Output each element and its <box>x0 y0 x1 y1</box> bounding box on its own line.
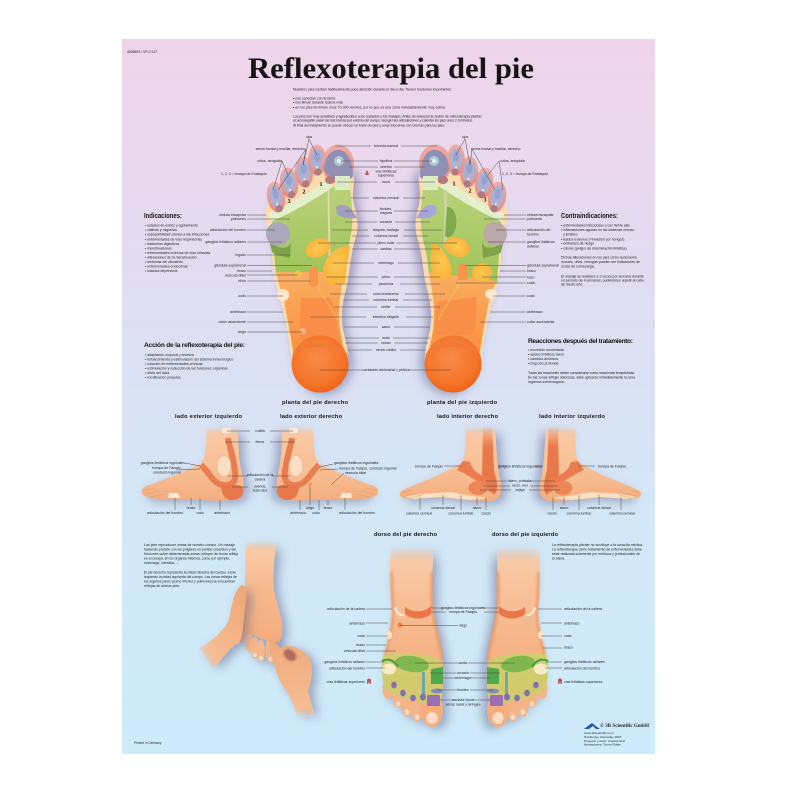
intro text: • nos conectan con la tierra <box>293 96 335 100</box>
text block: massage explanation: en el cuerpo, en los órganos internos, como por ejemplo, <box>144 556 230 560</box>
zone: adrenal and kidney <box>309 266 318 287</box>
zone: heel <box>292 336 348 392</box>
labels: plantar right foot left side: riñón <box>238 279 246 283</box>
text block: massage explanation: haciendo presión con los pulgares en puntos concretos y las <box>144 547 236 551</box>
panel: contraindicaciones: micosis, uñas, verrugas pueden ser indicadores de <box>561 260 640 264</box>
labels: plantar left foot right side: axilares <box>527 244 539 248</box>
panel: indicaciones: • trastornos digestivos <box>145 242 180 246</box>
labels: side views: ganglios linfáticos inguinales <box>498 465 542 469</box>
caption: planta del pie izquierdo: planta del pie izquierdo <box>427 400 497 406</box>
labels: plantar center column: corazón <box>380 220 392 224</box>
toe numbers: 1 <box>320 182 322 188</box>
labels: side views: columna dorsal <box>431 506 455 510</box>
labels: plantar center column: tráquea, esófago <box>373 228 399 232</box>
toe numbers <box>288 182 322 205</box>
labels: dorsal: ganglios linfáticos axilares <box>324 660 365 664</box>
labels: side views: vejiga <box>515 488 525 492</box>
labels: side views: articulación de la <box>247 473 273 477</box>
panel: contraindicaciones: • cáncer (peligro de diseminación linfática) <box>561 246 627 250</box>
label lines: plantar <box>247 139 526 370</box>
labels: plantar center column: nervio ciático <box>376 348 396 352</box>
labels: plantar left foot right side: ojos <box>462 135 468 139</box>
zone: heart <box>445 207 456 237</box>
panel: contraindicaciones: y linfático <box>563 233 578 237</box>
labels: side views: rodilla <box>255 429 265 433</box>
zone: gall bladder <box>294 270 302 278</box>
logo: 3B Scientific <box>584 722 649 746</box>
panel: contraindicaciones: • inflamaciones agudas en los sistemas venoso <box>561 228 634 232</box>
labels: side views: cadera <box>255 478 265 482</box>
panel: reacciones después del tratamiento: • tejidos linfáticos laxos <box>528 352 564 356</box>
labels: side views: testículos <box>253 489 268 493</box>
panel: acción de la reflexoterapia: • curación de enfermedades crónicas <box>145 362 203 366</box>
labels: dorsal: codo <box>357 634 365 638</box>
labels: side views: codo <box>312 511 320 515</box>
labels: side views: ganglios linfáticos inguinales <box>141 461 185 465</box>
text block: massage explanation: El pie derecho representa la mitad derecha del cuerpo, el pie <box>144 570 236 574</box>
labels: side views: fémur <box>256 440 265 444</box>
panel: reacciones después del tratamiento: • irrupción profunda <box>528 362 558 366</box>
zone: elbow <box>485 289 497 299</box>
panel: contraindicaciones: zonas de sobrecarga. <box>561 264 595 268</box>
zone: orange abdomen <box>276 272 345 358</box>
labels: plantar right foot left side: hígado <box>235 253 246 257</box>
labels: plantar right foot left side: articulación del hombro <box>210 228 246 232</box>
icon: lymph vessels right <box>367 678 371 684</box>
logo: 3B Scientific: Ilustraciones: Tomer Rothe <box>584 742 621 746</box>
zone: small intestine <box>435 297 476 335</box>
labels: dorsal: antebrazo <box>349 621 365 625</box>
heading: contraindicaciones: Contraindicaciones: <box>561 211 618 220</box>
foot: lado exterior derecho <box>277 426 378 501</box>
panel: reacciones después del tratamiento: orgánica sobrecargada. <box>528 380 565 384</box>
labels: plantar right foot left side: cintura escapular <box>219 213 247 217</box>
panel: indicaciones: • síntomas del climaterio <box>145 260 183 264</box>
labels: plantar right foot left side: ganglios linfáticos axilares <box>205 240 246 244</box>
labels: dorsal: cavidad bucal <box>452 698 474 702</box>
labels: side views: articulación del hombro <box>147 511 183 515</box>
labels: side views: columna lumbar <box>449 512 474 516</box>
panel: contraindicaciones: Dichas alteraciones en los pies como sudoración, <box>561 256 638 260</box>
labels: dorsal: ganglios linfáticos inguinales <box>441 606 485 610</box>
zone: elbow <box>277 289 289 301</box>
labels: side views: conducto inguinal <box>153 470 181 474</box>
labels: plantar center column: páncreas <box>379 282 393 286</box>
poster background <box>122 39 655 754</box>
logo: 3B Scientific: Proyecto y texto: Joanna Graf <box>584 739 625 743</box>
labels: plantar center column: columna lumbar <box>374 298 399 302</box>
labels: plantar left foot right side: antebrazo <box>527 310 543 314</box>
text block: massage explanation: izquierdo la mitad izquierda del cuerpo. Las zonas reflejas de <box>144 575 237 579</box>
labels: dorsal: ciego <box>459 624 467 628</box>
labels: plantar center column: uréter <box>381 305 391 309</box>
panel: contraindicaciones: • tejidos externos (=invasión por hongos) <box>561 237 624 241</box>
labels: plantar center column: estómago <box>378 261 394 265</box>
labels: dorsal: brazo <box>564 646 573 650</box>
toe numbers: 3 <box>484 198 486 204</box>
labels: side views: columna dorsal <box>587 506 611 510</box>
panel: acción de la reflexoterapia: • fortalecimiento y estimulación del sistema inmunológico <box>145 358 233 362</box>
labels: dorsal: vías linfáticas superiores <box>564 680 603 684</box>
labels: side views: trompa de Falopio, conducto inguinal <box>339 467 397 471</box>
labels: side views: columna cervical <box>406 512 432 516</box>
labels: dorsal: articulación de la cadera <box>327 607 365 611</box>
labels: plantar center column: sacro <box>382 325 390 329</box>
caption: lado interior derecho: lado interior derecho <box>437 414 498 420</box>
zone: gall bladder <box>328 484 332 486</box>
labels: plantar center column: nuca <box>382 180 390 184</box>
labels: plantar center column: tráquea <box>380 211 392 215</box>
labels: side views: columna cervical <box>609 512 635 516</box>
panel: indicaciones: • estados depresivos <box>145 269 178 273</box>
panel: acción de la reflexoterapia: • alivio del dolor <box>145 371 170 375</box>
labels: dorsal: estómago <box>455 676 471 680</box>
panel: reacciones después del tratamiento: Todas las reacciones deben considerarse como reacciones terapéuticas. <box>528 371 635 375</box>
text block: massage explanation: fricciones sobre determinadas zonas, influyen de forma refleja <box>144 552 238 556</box>
labels: plantar center column: cavidades abdominal y pélvica <box>362 368 410 372</box>
labels: side views: columna lumbar <box>567 512 592 516</box>
intro text: • nos llevan durante toda la vida <box>293 100 343 104</box>
title: Reflexoterapia del pie <box>248 52 534 85</box>
labels: dorsal: vías linfáticas superiores <box>327 680 365 684</box>
labels: plantar left foot right side: glándula suprarrenal <box>527 264 559 268</box>
zone: spleen <box>472 264 492 282</box>
labels: plantar left foot right side: oídos, amígdala <box>500 159 525 163</box>
toe numbers: 2 <box>302 190 306 196</box>
labels: plantar right foot left side: codo <box>238 294 246 298</box>
labels: side views: sacro <box>473 506 481 510</box>
labels: dorsal: tiroides <box>457 688 469 692</box>
labels: dorsal: ganglios linfáticos axilares <box>564 660 605 664</box>
labels: side views: cóccix <box>481 512 491 516</box>
labels: side views: trompa de Falopio, <box>152 466 182 470</box>
labels: plantar left foot right side: brazo <box>527 269 536 273</box>
panel: contraindicaciones: • enfermedades infecciosas y con fiebre alta <box>561 224 630 228</box>
panel: contraindicaciones: de medio año. <box>561 283 583 287</box>
zone: solar plexus <box>302 234 334 262</box>
labels: plantar right foot left side: ciego <box>238 330 246 334</box>
text block: massage explanation: reflejas de ambos pies. <box>144 584 180 588</box>
labels: plantar right foot left side: senos frontal y maxilar, derecho <box>256 147 305 151</box>
panel: acción de la reflexoterapia: • adaptación corporal y anímica <box>145 353 194 357</box>
foot: lado interior derecho <box>400 426 501 501</box>
foot <box>237 540 282 663</box>
zone: shoulder <box>266 222 290 246</box>
labels: plantar right foot left side: antebrazo <box>230 310 246 314</box>
logo: 3B Scientific: © 3B Scientific GmbH <box>600 722 649 729</box>
zone: small intestine <box>300 298 338 340</box>
heading: indicaciones: Indicaciones: <box>144 211 182 220</box>
labels: side views <box>141 429 635 516</box>
text block: medical note: estar realizada solamente por médicos y profesionales de <box>552 552 640 556</box>
labels: plantar center column: bóveda craneal <box>374 144 398 148</box>
left hand <box>199 585 246 668</box>
caption: planta del pie derecho: planta del pie derecho <box>282 400 348 406</box>
labels: plantar center column <box>362 144 410 372</box>
zone: adrenal and kidney <box>458 264 467 280</box>
labels: plantar left foot right side: pulmones <box>527 217 542 221</box>
text block: massage explanation <box>144 543 238 588</box>
labels: plantar center column: vías linfáticas <box>375 169 397 173</box>
foot: lado interior izquierdo <box>540 426 641 501</box>
icon: lymph vessels left <box>558 678 562 684</box>
labels: dorsal: vesícula biliar <box>344 649 366 653</box>
labels: side views: ciego <box>306 506 314 510</box>
labels: plantar left foot right side: senos frontal y maxilar, derecho <box>471 147 520 151</box>
labels: plantar left foot right side: 1, 2, 3 = trompa de Eustaquio <box>502 172 548 176</box>
labels: plantar left foot right side: ganglios linfáticos <box>527 240 555 244</box>
text block: medical note: la salud. <box>552 556 565 560</box>
labels: side views: sacro <box>560 506 568 510</box>
labels: side views: vesícula biliar <box>345 471 367 475</box>
labels: plantar center column: tiroides, <box>380 207 392 211</box>
intro text: • en los pies terminan unos 70.000 nervios, por lo que es una zona indudablemente muy activa <box>293 106 445 110</box>
labels: plantar right foot left side: brazo <box>237 269 246 273</box>
intro text: es aconsejable pasar las dos manos por encima del cuerpo, recoger las articulaciones y calentar los pies unos 2-3 minutos. <box>293 119 473 123</box>
labels: dorsal: corazón <box>457 671 469 675</box>
icon: lymph vessels <box>365 170 369 175</box>
labels: plantar left foot right side: colon ascendente <box>527 320 554 324</box>
labels: side views: recto, ano <box>512 484 528 488</box>
icon: logo triangle <box>584 723 600 729</box>
labels: plantar left foot right side: hombro <box>527 232 539 236</box>
foot: planta del pie izquierdo <box>415 144 509 392</box>
labels: side views: útero, próstata <box>509 479 531 483</box>
panel: acción de la reflexoterapia: • movilización psíquica <box>145 376 180 380</box>
labels: dorsal <box>324 606 605 706</box>
labels: side views: antebrazo <box>214 511 230 515</box>
panel: contraindicaciones <box>561 211 644 287</box>
labels: dorsal: articulación del hombro <box>564 666 600 670</box>
foot: dorso del pie derecho <box>382 546 443 727</box>
labels: dorsal: trompa de Falopio <box>449 610 477 614</box>
intro text: Nuestros pies reciben habitualmente poca atención durante el día a día. Tienen funciones importantes: <box>293 88 452 92</box>
toe numbers: 2 <box>468 188 472 194</box>
illustration: hands massaging foot <box>199 540 315 718</box>
panel: reacciones después del tratamiento: • excreción aumentada <box>528 348 564 352</box>
text block: massage explanation: los órganos pares (como riñones y pulmones) se encuentran <box>144 580 235 584</box>
labels: plantar center column: colon transverso <box>373 292 399 296</box>
labels: side views: antebrazo <box>290 511 306 515</box>
zone: heel <box>424 336 482 392</box>
labels: plantar right foot left side <box>205 135 312 334</box>
foot: dorso del pie izquierdo <box>487 546 548 727</box>
labels: plantar center column: cerebro <box>380 165 392 169</box>
labels: side views: cóccix <box>547 512 557 516</box>
toe numbers <box>452 182 486 204</box>
panel: indicaciones: • ciáticas y migrañas <box>145 228 177 232</box>
panel: indicaciones: • menstruaciones <box>145 246 172 250</box>
labels: dorsal: antebrazo <box>564 621 580 625</box>
panel: indicaciones: • enfermedades de vías respiratorias <box>145 237 202 241</box>
labels: plantar right foot left side: oídos, amígdala <box>257 159 282 163</box>
labels: dorsal: articulación de la cadera <box>564 607 602 611</box>
labels: plantar center column: hipófisis <box>380 159 393 163</box>
panel: indicaciones: • enfermedades endocrinas <box>145 265 188 269</box>
caption: lado exterior izquierdo: lado exterior izquierdo <box>175 414 242 420</box>
intro text <box>293 88 482 128</box>
labels: side views: codo <box>196 511 204 515</box>
right hand <box>269 642 315 718</box>
labels: plantar center column: intestino delgado <box>373 315 399 319</box>
panel: indicaciones: • estados de estrés y agotamiento <box>145 224 198 228</box>
panel: indicaciones <box>144 211 210 273</box>
labels: plantar center column: cardias <box>380 247 392 251</box>
labels: side views: articulación del hombro <box>339 511 375 515</box>
labels: side views: ganglios linfáticos inguinales <box>334 461 379 465</box>
heading: acción: Acción de la reflexoterapia del pie: <box>144 342 245 349</box>
printed note: Printed in Germany <box>134 741 162 745</box>
panel: contraindicaciones: • embarazo de riesgo <box>561 242 594 246</box>
labels: plantar right foot left side: ojos <box>306 135 312 139</box>
labels: side views: trompa de Falopio <box>415 465 443 469</box>
zone: solar plexus <box>442 234 472 260</box>
caption: lado interior izquierdo: lado interior izquierdo <box>539 414 605 420</box>
panel: indicaciones: • alteraciones de la menstruación <box>145 256 197 260</box>
toe numbers: 1 <box>452 182 456 188</box>
panel: reacciones después del tratamiento: En las zonas reflejas dolorosas, debe aplicarse inmediatamente la zona <box>528 376 635 380</box>
text block: medical note: La reflexoterapia plantar no sustituye a la consulta médica. <box>552 543 643 547</box>
labels: plantar center column: cóccix <box>381 341 391 345</box>
labels: dorsal: codo <box>564 634 572 638</box>
intro text: Al final del tratamiento se puede ofrecer un baño de pies y unas fricciones con cremas para los pies. <box>293 124 445 128</box>
labels: dorsal: brazo <box>356 643 365 647</box>
labels: plantar center column: superiores <box>378 173 394 177</box>
zone: cecum <box>398 622 402 628</box>
labels: dorsal: senos nasal y laringea <box>446 702 480 706</box>
text block: massage explanation: estómago, intestino, ... <box>144 561 179 565</box>
panel: indicaciones: • enfermedades crónicas de vías urinarias <box>145 251 210 255</box>
palm shadow <box>281 647 299 663</box>
foot: lado exterior izquierdo <box>142 426 243 501</box>
text block: massage explanation: Los pies reproducen zonas de nuestro cuerpo. Un masaje <box>144 543 235 547</box>
label lines: dorsal <box>366 608 562 700</box>
zone: stomach <box>431 243 452 280</box>
heading: reacciones: Reacciones después del tratamiento: <box>528 338 633 345</box>
labels: plantar center column: columna dorsal <box>374 234 398 238</box>
toe numbers: 3 <box>288 199 290 205</box>
labels: plantar left foot right side: colon <box>527 281 535 285</box>
zone: pancreas <box>323 275 345 285</box>
caption: lado exterior derecho: lado exterior derecho <box>280 414 342 420</box>
logo: 3B Scientific: www.3bscientific.com <box>584 731 614 735</box>
foot: planta del pie derecho <box>264 144 358 392</box>
labels: plantar right foot left side: vesícula biliar <box>225 273 247 277</box>
intro text: Los pies son muy sensitivos y agradecidos a los cuidados y los masajes. Antes de empezar la sesión de reflexoterapia plantar, <box>293 114 482 118</box>
zone: cecum <box>308 482 312 486</box>
product code: 4006893 / VR 3 917 <box>127 50 157 54</box>
panel: contraindicaciones: un período de 4 semanas, pudiéndose repetir al cabo <box>561 278 644 282</box>
labels: plantar center column: columna cervical <box>373 196 399 200</box>
labels: plantar right foot left side: 1, 2, 3 = trompa de Eustaquio <box>221 172 267 176</box>
zone: green chest <box>272 186 352 275</box>
labels: dorsal: aorta <box>459 661 467 665</box>
labels: plantar center column: plexo solar <box>378 241 395 245</box>
labels: plantar left foot right side: codo <box>527 294 535 298</box>
labels: plantar center column: recto <box>382 336 390 340</box>
labels: plantar left foot right side <box>462 135 559 324</box>
caption: dorso del pie izquierdo: dorso del pie izquierdo <box>492 532 558 538</box>
caption: dorso del pie derecho: dorso del pie derecho <box>374 532 437 538</box>
panel: reacciones después del tratamiento: • cambios anímicos <box>528 357 558 361</box>
labels: side views: ovarios, <box>254 484 266 488</box>
panel: acción de la reflexoterapia <box>144 342 245 380</box>
labels: plantar left foot right side: bazo <box>527 275 535 279</box>
labels: plantar right foot left side: glándula suprarrenal <box>214 264 246 268</box>
logo: 3B Scientific: Hamburgo, Alemania, 2007 <box>584 735 622 739</box>
zone: toe band <box>268 181 333 221</box>
labels: plantar right foot left side: colon ascendente <box>219 320 246 324</box>
labels: plantar right foot left side: pulmones <box>231 217 246 221</box>
labels: side views: brazo <box>324 506 332 510</box>
labels: side views: brazo <box>187 506 195 510</box>
labels: plantar center column: píloro <box>382 275 390 279</box>
text block: medical note <box>552 543 643 560</box>
labels: plantar left foot right side: cintura escapular <box>527 213 554 217</box>
panel: indicaciones: • susceptibilidad crónica a las infecciones <box>145 233 210 237</box>
text block: medical note: La reflexoterapia como tratamiento de enfermedades debe <box>552 547 642 551</box>
labels: dorsal: articulación del hombro <box>329 666 365 670</box>
panel: acción de la reflexoterapia: • estimulación y reducción de las funciones orgánicas <box>145 366 228 370</box>
zone: thyroid <box>336 205 357 218</box>
panel: contraindicaciones: El masaje se realizará 1-2 veces por semana durante <box>561 274 644 278</box>
zone: dark green shoulder <box>269 240 291 258</box>
panel: reacciones después del tratamiento <box>528 338 635 384</box>
labels: plantar left foot right side: articulación del <box>527 228 551 232</box>
labels: side views: trompa de Falopio <box>598 465 626 469</box>
label lines: side views <box>175 431 621 510</box>
zone: stomach <box>323 246 350 284</box>
